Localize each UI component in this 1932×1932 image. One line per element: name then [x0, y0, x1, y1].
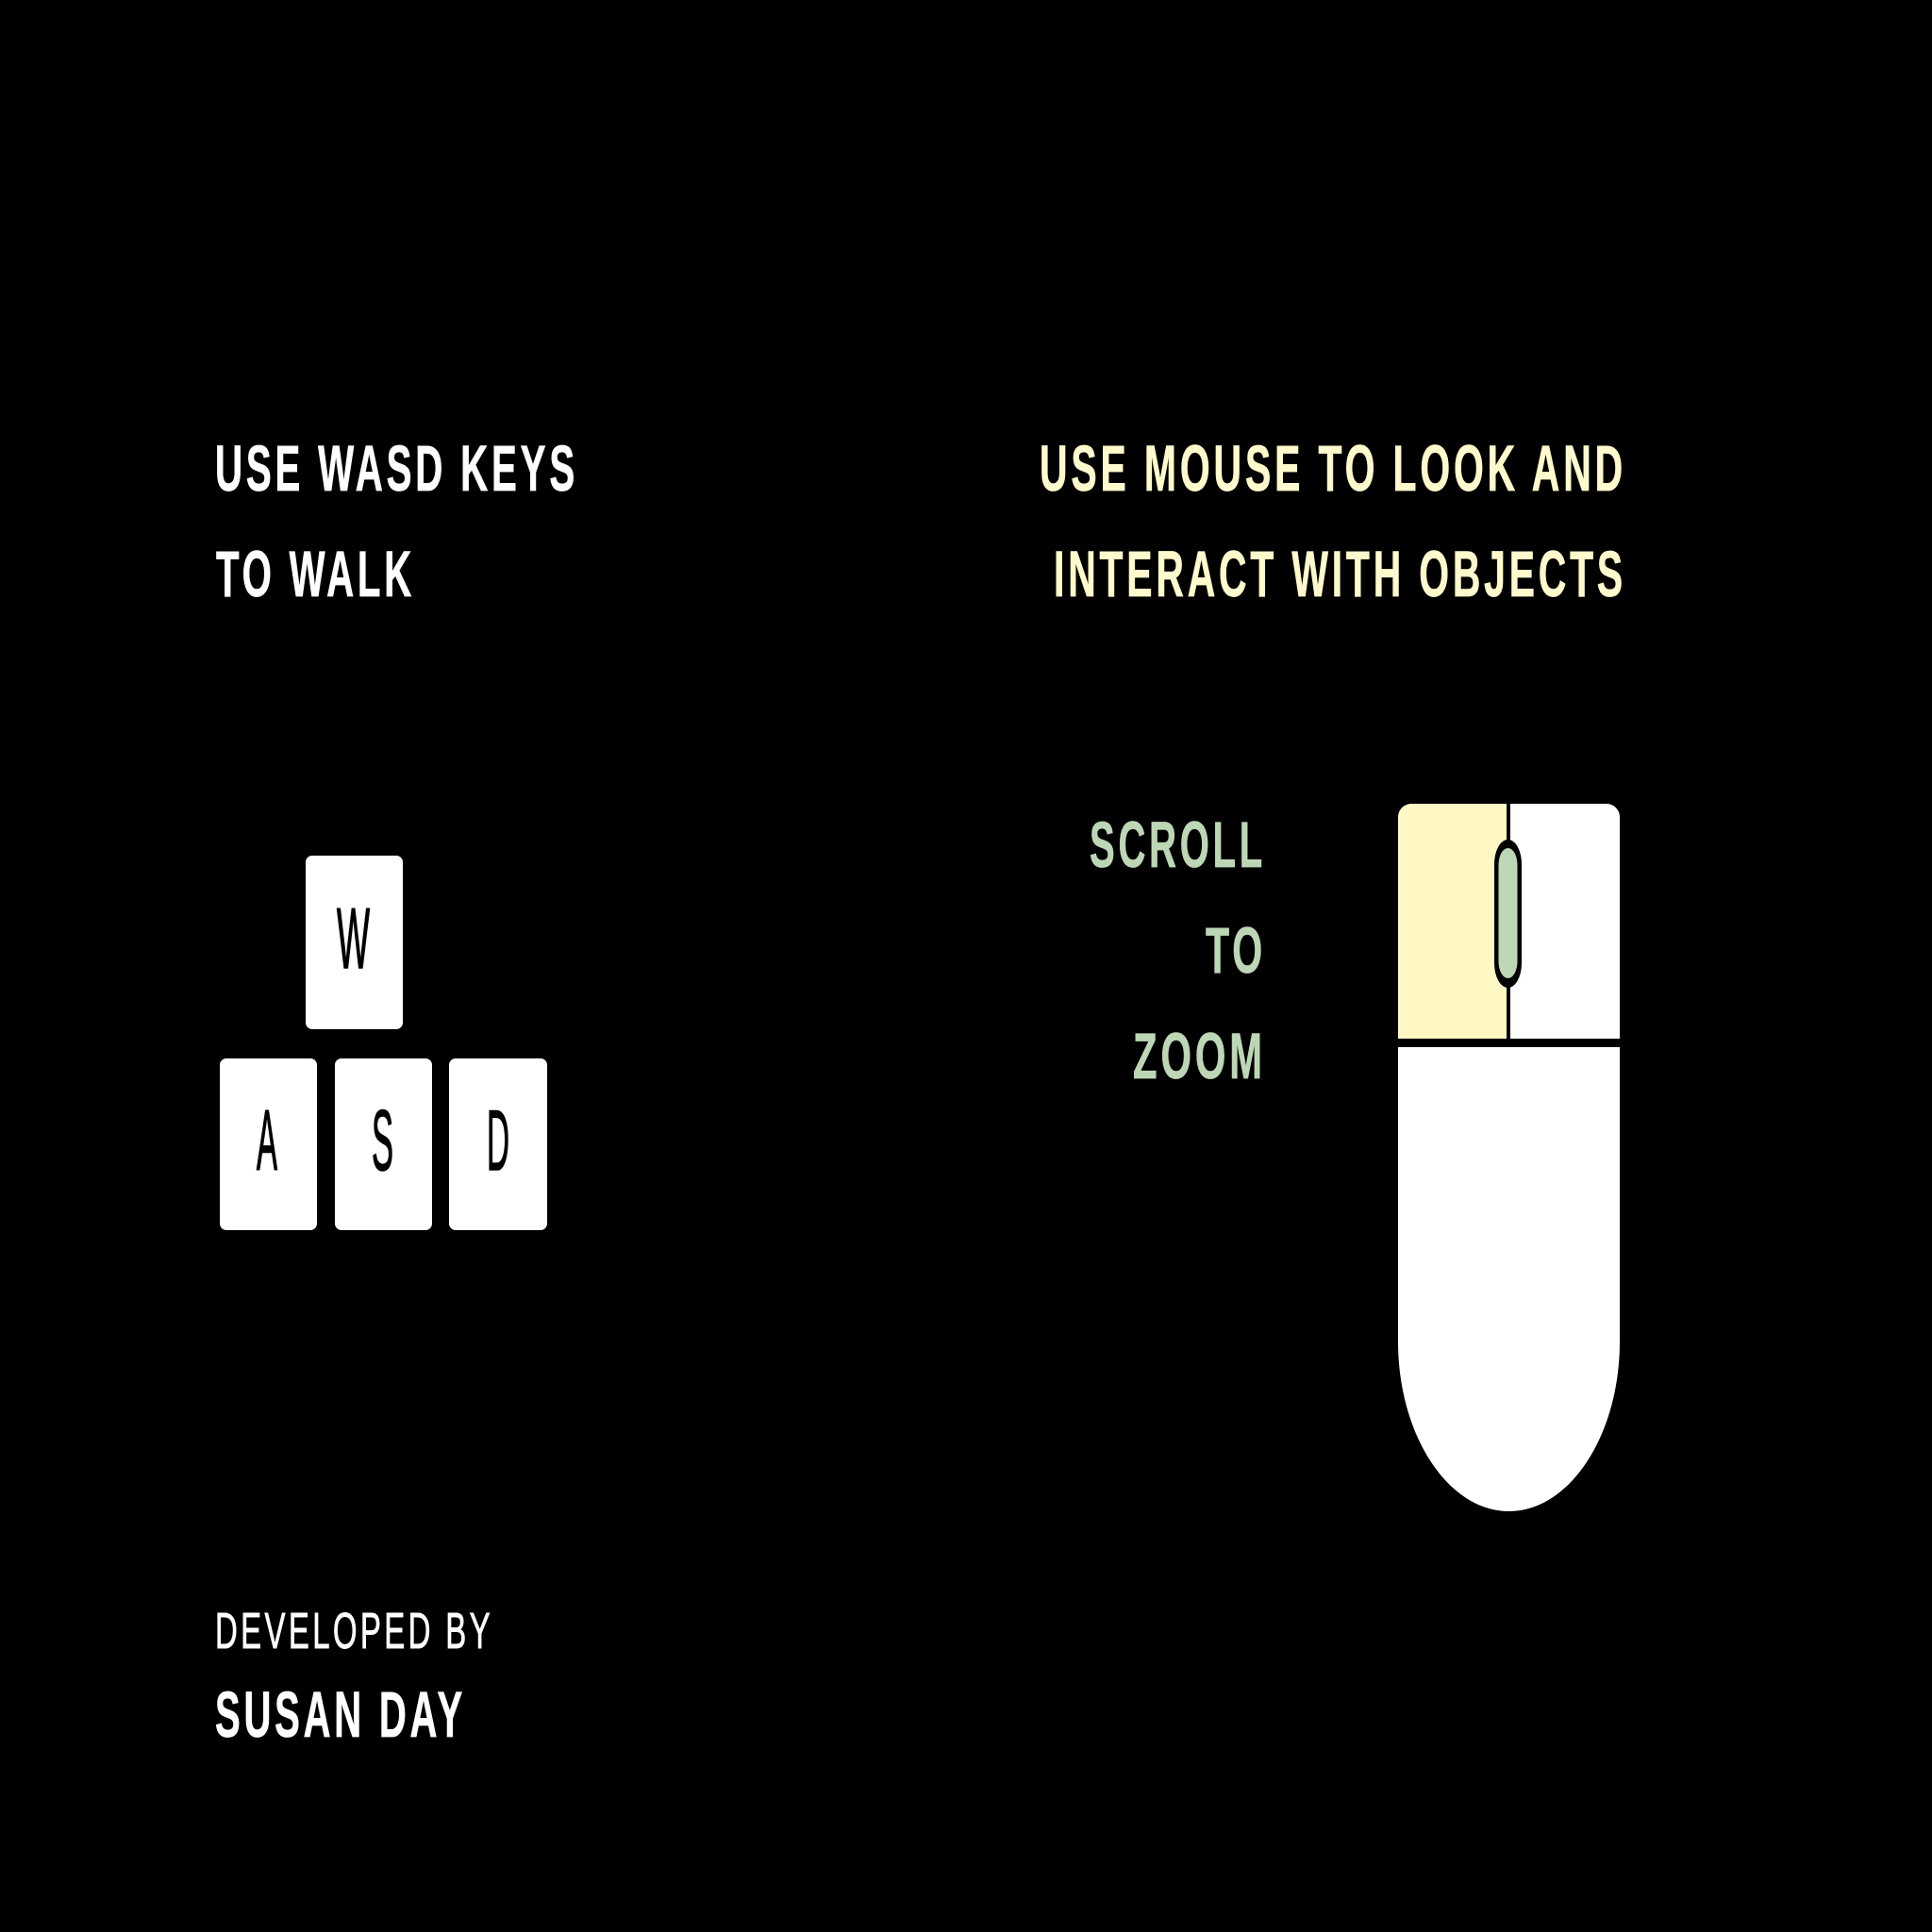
- key W: W: [337, 891, 370, 987]
- heading: WASD instructions: TO WALK: [216, 538, 415, 610]
- key W: [306, 856, 403, 1029]
- left mouse button: [1398, 804, 1507, 1039]
- key A: A: [257, 1093, 277, 1189]
- key S: [335, 1058, 432, 1230]
- heading: mouse instructions: [1040, 432, 1626, 610]
- credit: developer: [215, 1603, 493, 1751]
- icon: mouse: [1398, 804, 1620, 1511]
- key D: [449, 1058, 547, 1230]
- scroll wheel: [1494, 840, 1522, 988]
- mouse body: [1398, 1047, 1620, 1511]
- label: scroll to zoom: [1090, 808, 1266, 1092]
- credit: developer: DEVELOPED BY: [215, 1603, 493, 1659]
- credit: developer: SUSAN DAY: [215, 1678, 466, 1751]
- key S: S: [372, 1093, 393, 1189]
- heading: WASD instructions: [215, 432, 578, 610]
- icon: WASD keys: [220, 856, 547, 1230]
- label: scroll to zoom: ZOOM: [1133, 1020, 1266, 1092]
- right mouse button: [1510, 804, 1620, 1039]
- heading: WASD instructions: USE WASD KEYS: [215, 432, 578, 505]
- label: scroll to zoom: TO: [1206, 914, 1266, 987]
- label: scroll to zoom: SCROLL: [1090, 808, 1266, 881]
- key D: D: [487, 1093, 509, 1189]
- key A: [220, 1058, 317, 1230]
